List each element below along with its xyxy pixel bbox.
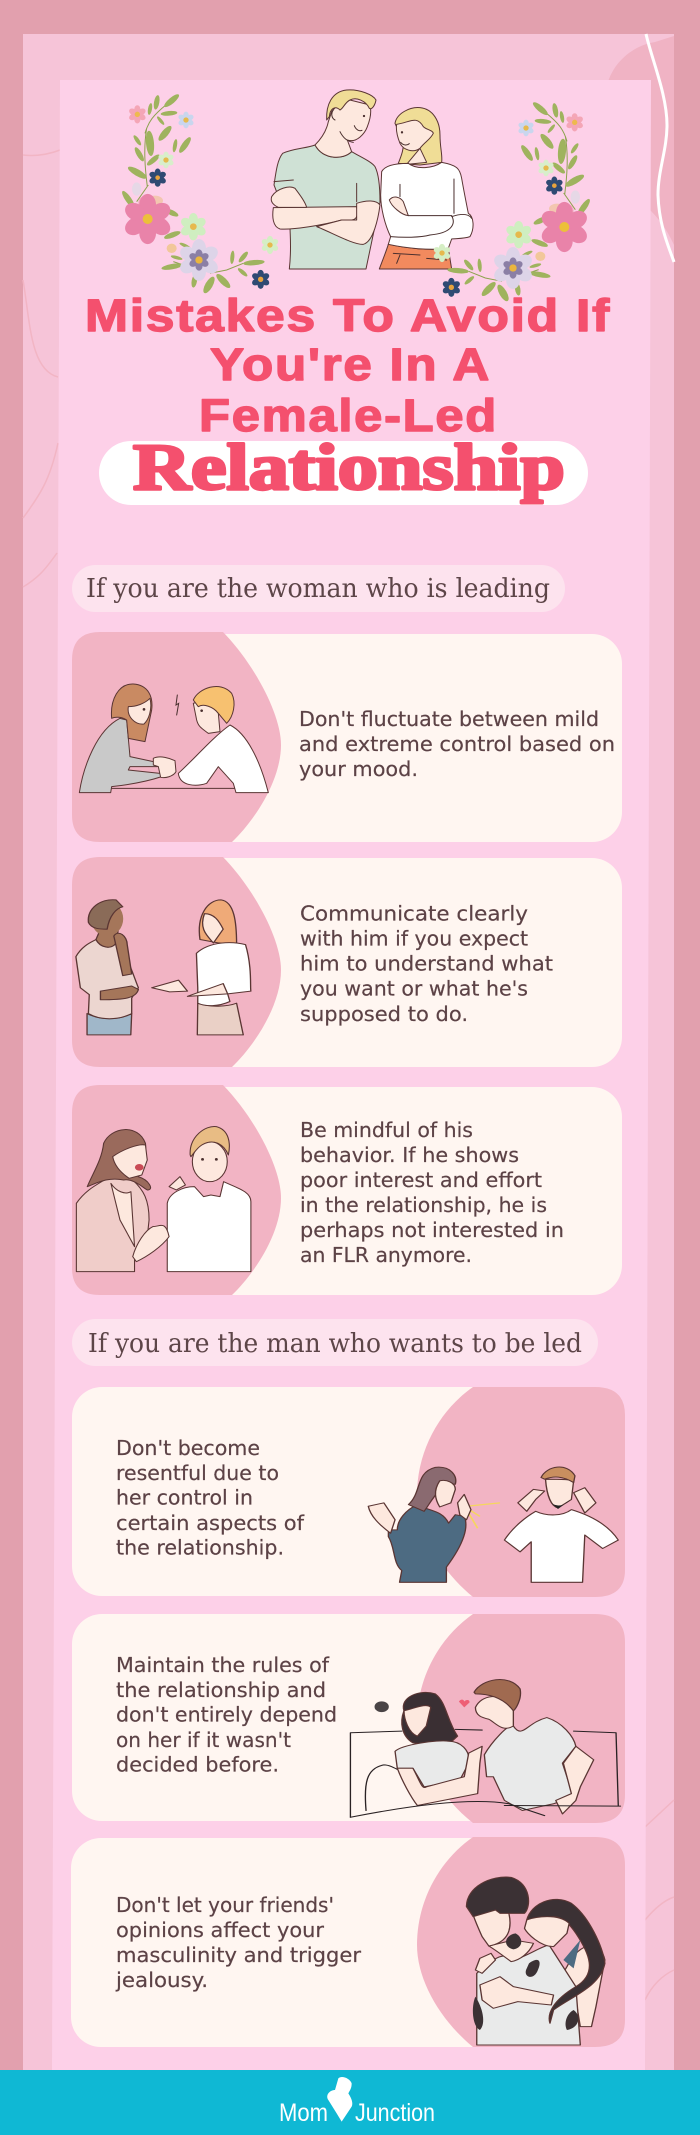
heading: woman section — [72, 565, 565, 612]
text — [300, 1118, 564, 1267]
text: the relationship. — [116, 1536, 284, 1560]
footer bar — [0, 2070, 700, 2135]
text: on her if it wasn't — [116, 1728, 291, 1752]
card 4 — [72, 1387, 625, 1597]
card 6 — [71, 1837, 625, 2047]
illustration: couple — [271, 90, 473, 269]
title: You're In A — [210, 339, 491, 390]
text: perhaps not interested in — [300, 1218, 564, 1242]
card 2 — [72, 857, 622, 1067]
title: Mistakes To Avoid If — [85, 290, 611, 341]
card 5 — [72, 1614, 625, 1823]
illustration: man and woman talking — [76, 900, 251, 1035]
text — [116, 1653, 337, 1776]
title: Female-Led — [199, 390, 498, 441]
text: Don't fluctuate between mild — [299, 707, 599, 731]
text: certain aspects of — [116, 1511, 305, 1535]
illustration: woman scolding man — [76, 1127, 251, 1272]
text: her control in — [116, 1486, 253, 1510]
text — [115, 1893, 362, 1992]
text: opinions affect your — [116, 1918, 325, 1942]
text: with him if you expect — [300, 926, 528, 950]
text: decided before. — [116, 1752, 279, 1776]
illustration: couple in bed — [350, 1680, 620, 1817]
text: don't entirely depend — [116, 1702, 337, 1726]
text: Be mindful of his — [300, 1118, 473, 1142]
heading: man section: If you are the man who wants to be led — [88, 1329, 582, 1359]
text: Don't become — [116, 1436, 260, 1460]
illustration: arguing at table — [79, 684, 268, 793]
logo: MomJunction — [279, 2077, 435, 2127]
illustration: woman shouting, man covering ears — [368, 1467, 618, 1582]
card 3 — [72, 1085, 622, 1295]
text: jealousy. — [115, 1968, 208, 1992]
background blob — [608, 36, 674, 245]
text: the relationship and — [116, 1678, 326, 1702]
background curve — [646, 34, 674, 262]
illustration: left floral wreath — [120, 92, 279, 295]
inner panel — [52, 80, 651, 2070]
heading: man section — [72, 1319, 598, 1366]
text: Communicate clearly — [300, 902, 528, 926]
text: masculinity and trigger — [116, 1943, 362, 1967]
text: Maintain the rules of — [116, 1653, 330, 1677]
text — [299, 707, 615, 781]
illustration: right floral wreath — [433, 100, 592, 303]
text: your mood. — [299, 757, 418, 781]
text: supposed to do. — [300, 1002, 468, 1026]
illustration: woman hugging man from behind — [466, 1877, 605, 2045]
text: in the relationship, he is — [300, 1193, 547, 1217]
text: poor interest and effort — [300, 1168, 542, 1192]
title pill: Relationship — [133, 431, 565, 504]
text: you want or what he's — [300, 976, 528, 1000]
logo: MomJunction: Junction — [355, 2099, 435, 2127]
text: resentful due to — [116, 1461, 279, 1485]
card 1 — [72, 632, 622, 842]
title — [85, 290, 611, 441]
text: him to understand what — [300, 952, 553, 976]
text: and extreme control based on — [299, 732, 615, 756]
text: Don't let your friends' — [116, 1893, 334, 1917]
text — [116, 1436, 305, 1560]
text: an FLR anymore. — [300, 1243, 472, 1267]
logo: MomJunction: Mom — [279, 2099, 328, 2127]
text: behavior. If he shows — [300, 1143, 519, 1167]
heading: woman section: If you are the woman who is leading — [86, 574, 550, 604]
text — [300, 902, 553, 1026]
